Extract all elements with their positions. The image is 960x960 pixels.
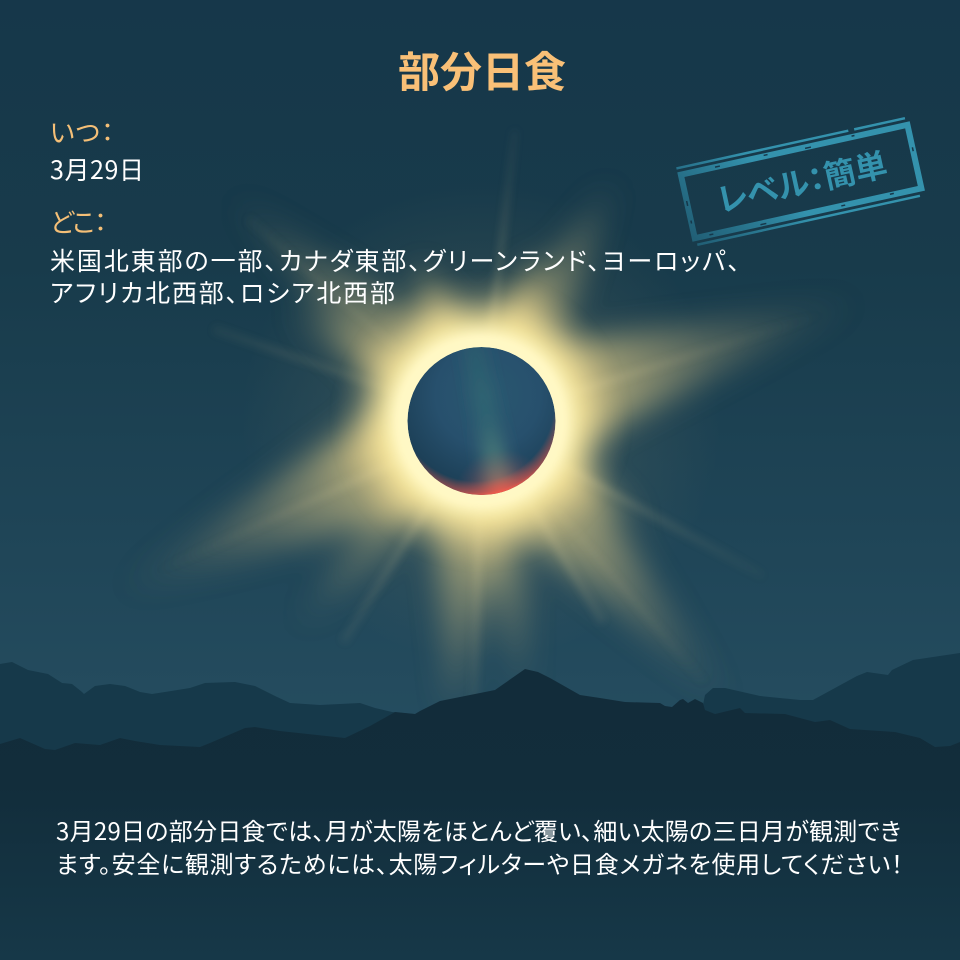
title: 部分日食 <box>398 39 566 100</box>
when label: いつ： <box>50 113 114 150</box>
back mountain range <box>0 653 960 760</box>
where label: どこ： <box>50 203 107 240</box>
sun corona rays <box>105 130 870 720</box>
stamp text: レベル：簡単 <box>713 140 891 222</box>
where text: 米国北東部の一部、カナダ東部、グリーンランド、ヨーロッパ、 <box>50 242 740 278</box>
background sky <box>0 0 960 760</box>
stamp frame <box>676 118 923 246</box>
difficulty stamp <box>676 118 923 246</box>
description text: ます。安全に観測するためには、太陽フィルターや日食メガネを使用してください！ <box>56 845 903 880</box>
where text: アフリカ北西部、ロシア北西部 <box>50 274 395 310</box>
moon disc <box>408 347 556 495</box>
description text: 3月29日の部分日食では、月が太陽をほとんど覆い、細い太陽の三日月が観測でき <box>56 812 901 847</box>
foreground mountain range and ground <box>0 669 960 960</box>
when text: 3月29日 <box>50 151 144 187</box>
